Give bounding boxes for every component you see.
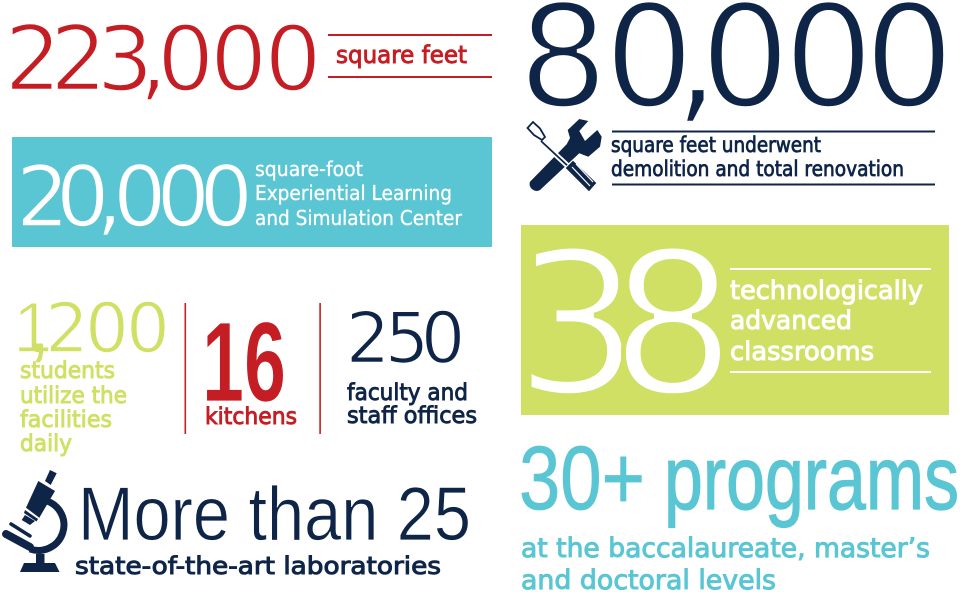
panel: 38 classrooms: technologically [730,276,923,306]
stat: 30+ programs [519,429,959,592]
stat: 16 kitchens: kitchens [205,404,297,430]
stat: 223,000 square feet: square feet [336,41,467,69]
panel: 38 classrooms [514,209,949,440]
stat: more than 25 laboratories: More than 25 [78,472,471,557]
stat: 1,200 students: facilities [20,407,112,433]
panel: 20,000 simulation center: 20,000 [16,148,253,246]
stat: 1,200 students: utilize the [20,383,127,409]
stat: more than 25 laboratories: state-of-the-art laboratories [75,552,441,580]
stat: 250 offices: 250 [346,298,465,380]
icon: microscope [6,470,64,572]
stat: 1,200 students: 200 [45,289,170,369]
panel: 20,000 simulation center: Experiential Learning [255,181,452,205]
panel: 20,000 simulation center [12,137,492,247]
stat: 223,000 square feet: 223,000 [4,7,322,112]
panel: 20,000 simulation center: square-foot [255,157,363,181]
stat: 1,200 students [13,280,170,457]
icon: wrench and screwdriver [528,119,602,192]
stat: 30+ programs: 30+ [519,429,645,529]
stat: 1,200 students: students [20,358,115,384]
stat: 1,200 students: , [28,280,50,369]
panel: 20,000 simulation center: and Simulation Center [255,206,463,230]
stat: 16 kitchens: 16 [202,299,286,425]
stat: 1,200 students: 1 [13,289,52,368]
stat text: square feet renovated [611,130,935,186]
stat: 250 offices [346,298,477,429]
stat: 223,000 square feet [4,7,492,112]
stat: 250 offices: faculty and [347,380,468,406]
stat text: square feet renovated: demolition and total renovation [611,157,904,181]
panel: 38 classrooms: advanced [730,306,852,336]
stat: 1,200 students: daily [20,431,72,457]
panel: 38 classrooms: 38 [514,209,736,440]
stat: 250 offices: staff offices [347,403,477,429]
stat: 30+ programs: at the baccalaureate, master’s [521,533,930,564]
stat text: square feet renovated: square feet underwent [611,133,821,157]
panel: 38 classrooms: classrooms [730,337,874,367]
